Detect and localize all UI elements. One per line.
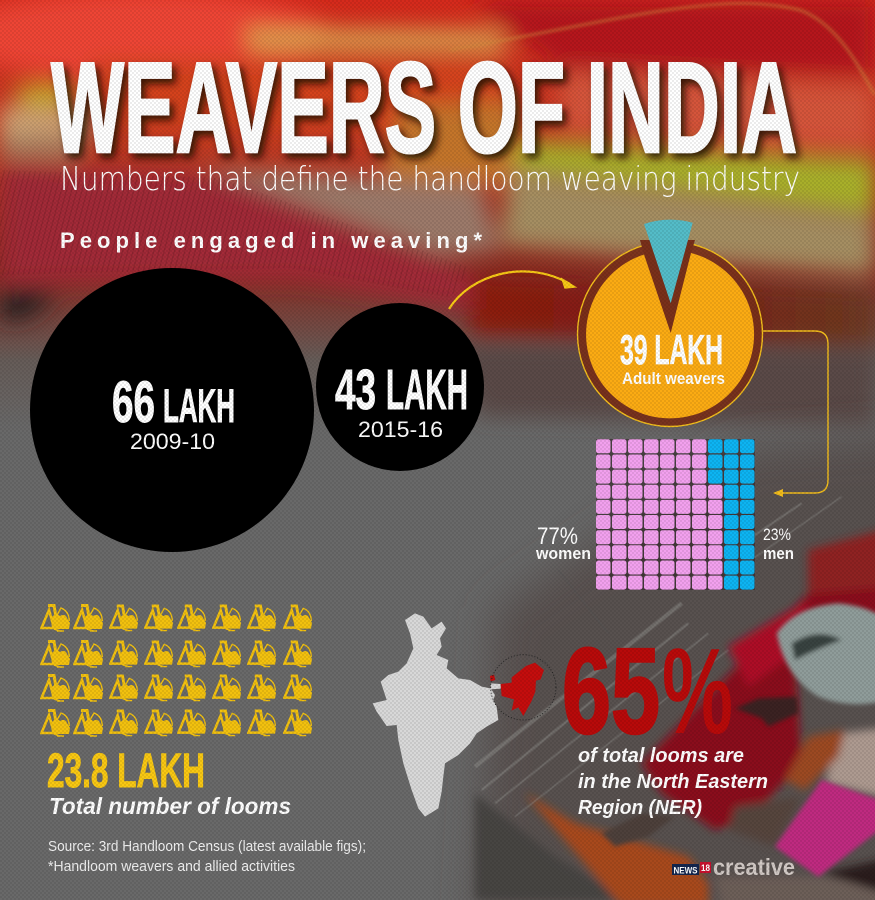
label: men (763, 525, 794, 563)
circle: 2009-10: 66 (112, 370, 155, 435)
logo: News18 Creative: NEWS (674, 866, 698, 876)
section heading: people engaged: People engaged in weaving* (60, 228, 482, 253)
label: men: 23% (763, 525, 791, 544)
waffle chart: 77% women, 23% men (596, 439, 755, 590)
label: women (535, 523, 591, 563)
icon grid: looms (42, 606, 312, 736)
source note: Source: 3rd Handloom Census (latest available figs); (48, 838, 366, 855)
circle: 2009-10: 2009-10 (130, 429, 215, 454)
arrow: connector to waffle (763, 331, 828, 497)
circle: 2009-10 (30, 268, 314, 552)
stat caption: north eastern region: of total looms are (578, 745, 744, 767)
source note: *Handloom weavers and allied activities (48, 858, 295, 875)
stat: 65 percent: % (662, 623, 733, 759)
logo: News18 Creative (672, 854, 795, 880)
arrow: to adult weavers (449, 271, 575, 309)
logo: News18 Creative: 18 (701, 863, 710, 873)
circle: 2015-16: LAKH (386, 358, 468, 422)
circle: 2015-16: 43 (335, 358, 376, 422)
label: women: women (535, 544, 591, 563)
stat: total looms: 23.8 LAKH (47, 745, 205, 798)
circle: 2015-16 (316, 303, 484, 471)
stat caption: north eastern region: in the North Eastern (578, 771, 768, 793)
pie slice: teal (644, 220, 693, 303)
stat caption: north eastern region (578, 745, 768, 819)
circle: 2015-16: 2015-16 (358, 417, 443, 442)
logo: News18 Creative: creative (713, 854, 795, 880)
label: men: men (763, 544, 794, 563)
pie: adult weavers (578, 220, 762, 426)
stat caption: total looms: Total number of looms (49, 793, 291, 819)
stat caption: north eastern region: Region (NER) (578, 797, 702, 819)
pie caption: Adult weavers (622, 369, 725, 388)
pie value: 39 LAKH (620, 326, 723, 373)
lower right loom photograph (475, 430, 875, 900)
stat: 65 percent: 65 (562, 623, 660, 759)
source note (48, 838, 366, 875)
map: India with north east highlighted (373, 613, 556, 817)
circle: 2009-10: LAKH (163, 379, 235, 432)
label: women: 77% (537, 523, 578, 550)
